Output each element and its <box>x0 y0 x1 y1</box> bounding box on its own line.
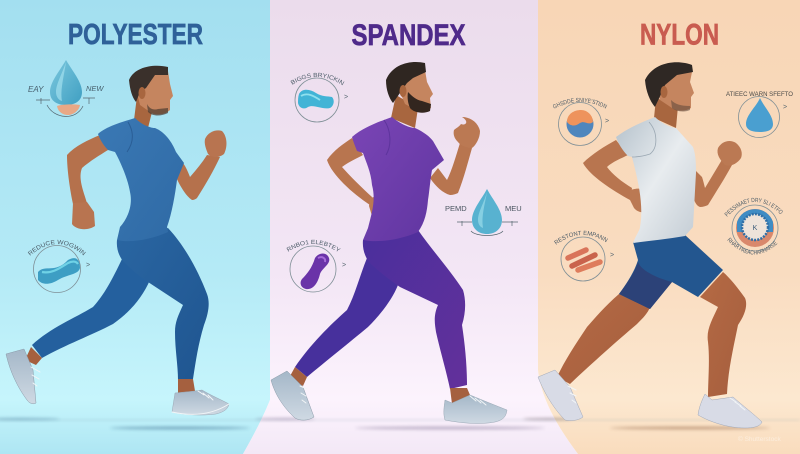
back arm <box>583 140 632 200</box>
icon: wave polyester: REDUCE WOGWIN <box>28 240 86 256</box>
back shoe <box>271 371 314 420</box>
ground shadows <box>0 418 800 429</box>
title: spandex: SPANDEX <box>352 19 466 52</box>
face <box>395 69 433 112</box>
face <box>655 71 694 111</box>
icon: blue drop nylon: > <box>783 104 787 111</box>
title: nylon: NYLON <box>640 18 719 52</box>
back leg <box>32 259 150 358</box>
icon: fabric strips <box>554 230 614 282</box>
sleeve seam <box>384 120 390 155</box>
back shoe laces <box>300 386 307 403</box>
back ankle <box>25 347 42 365</box>
icon: orange blue blob <box>553 98 609 146</box>
back shoe laces <box>568 386 576 403</box>
ear <box>138 87 146 99</box>
front leg skin <box>700 272 746 397</box>
icon: fabric strips: RESTONT EMPANN <box>554 230 608 245</box>
title: polyester: POLYESTER <box>68 19 203 51</box>
icon: water drop spandex <box>445 189 522 236</box>
front arm <box>176 155 220 200</box>
front leg <box>117 228 209 380</box>
back shoe laces <box>31 367 40 386</box>
neck <box>391 95 418 128</box>
front shoe <box>172 390 229 415</box>
figure: polyester runner <box>6 66 229 415</box>
front leg <box>363 230 467 389</box>
icon: fabric rings: PESSIMAET DRY SLI ETFO <box>724 198 783 217</box>
icon: fabric rings: K <box>753 225 758 232</box>
icon: water drop polyester: NEW <box>86 84 104 93</box>
face <box>135 70 173 114</box>
ear <box>400 85 406 97</box>
beard <box>408 92 431 113</box>
sleeve seam <box>127 122 132 152</box>
shirt <box>98 118 184 241</box>
neck <box>654 98 678 128</box>
figure: spandex runner <box>271 62 507 423</box>
icon: wave spandex: BIGGS BRYICKIN <box>290 72 344 86</box>
icon: fabric rings: RHAR PAEACHARHARSE <box>727 238 778 254</box>
front hand <box>454 117 480 148</box>
front shoe laces <box>730 398 745 410</box>
front hand <box>717 141 742 166</box>
back hand <box>72 202 95 229</box>
ear <box>660 86 668 98</box>
panel: nylon background <box>538 0 800 454</box>
beard stubble <box>147 104 168 116</box>
neck <box>134 96 153 128</box>
shirt <box>352 117 444 241</box>
shorts back leg shade <box>619 262 672 309</box>
icon: orange blue blob: GHSDDE SNIYE'STIDN <box>553 98 608 108</box>
icon: wave spandex: > <box>344 94 348 101</box>
back arm <box>327 138 372 205</box>
front shoe <box>444 395 507 423</box>
back shoe <box>538 370 583 421</box>
icon: fabric strips: > <box>610 252 614 259</box>
back leg <box>295 258 398 377</box>
icon: water drop spandex: MEU <box>505 204 522 213</box>
back hand <box>369 196 394 221</box>
watermark: © Shutterstock <box>738 435 781 443</box>
hair <box>129 66 168 102</box>
back shoe <box>6 349 36 404</box>
icon: blue drop nylon <box>726 91 793 138</box>
front shoe laces and sole <box>470 396 486 405</box>
icon: blue drop nylon: ATIEEC WARN SFEFTO <box>726 91 793 98</box>
sleeve seam <box>632 122 656 157</box>
shirt <box>616 117 696 243</box>
icon: wave polyester <box>28 240 90 293</box>
panel: spandex background <box>243 0 578 454</box>
shorts <box>619 235 723 309</box>
front shoe laces and sole <box>172 391 229 414</box>
stubble <box>671 100 690 111</box>
back hand <box>630 189 655 212</box>
back ankle <box>289 367 307 386</box>
icon: fabric rings <box>724 198 783 254</box>
icon: orange blue blob: > <box>605 118 609 125</box>
front arm <box>693 158 732 207</box>
icon: wave polyester: > <box>86 262 90 269</box>
hair <box>386 62 426 103</box>
front ankle <box>178 379 195 396</box>
icon: purple blob <box>286 240 346 292</box>
icon: wave spandex <box>290 72 348 122</box>
back leg skin <box>557 294 650 384</box>
front hand <box>205 130 226 157</box>
icon: water drop spandex: PEMD <box>445 204 467 213</box>
panel: polyester background <box>0 0 270 454</box>
front arm <box>430 143 472 195</box>
back arm <box>67 135 108 204</box>
icon: purple blob: RNBO1 ELEBTEY <box>286 240 341 252</box>
icon: water drop polyester <box>28 60 104 116</box>
figure: nylon runner <box>538 62 762 428</box>
icon: water drop polyester: EAY <box>28 85 44 94</box>
front shoe <box>698 394 762 428</box>
hair <box>645 62 693 107</box>
front ankle <box>450 388 470 404</box>
icon: purple blob: > <box>342 262 346 269</box>
